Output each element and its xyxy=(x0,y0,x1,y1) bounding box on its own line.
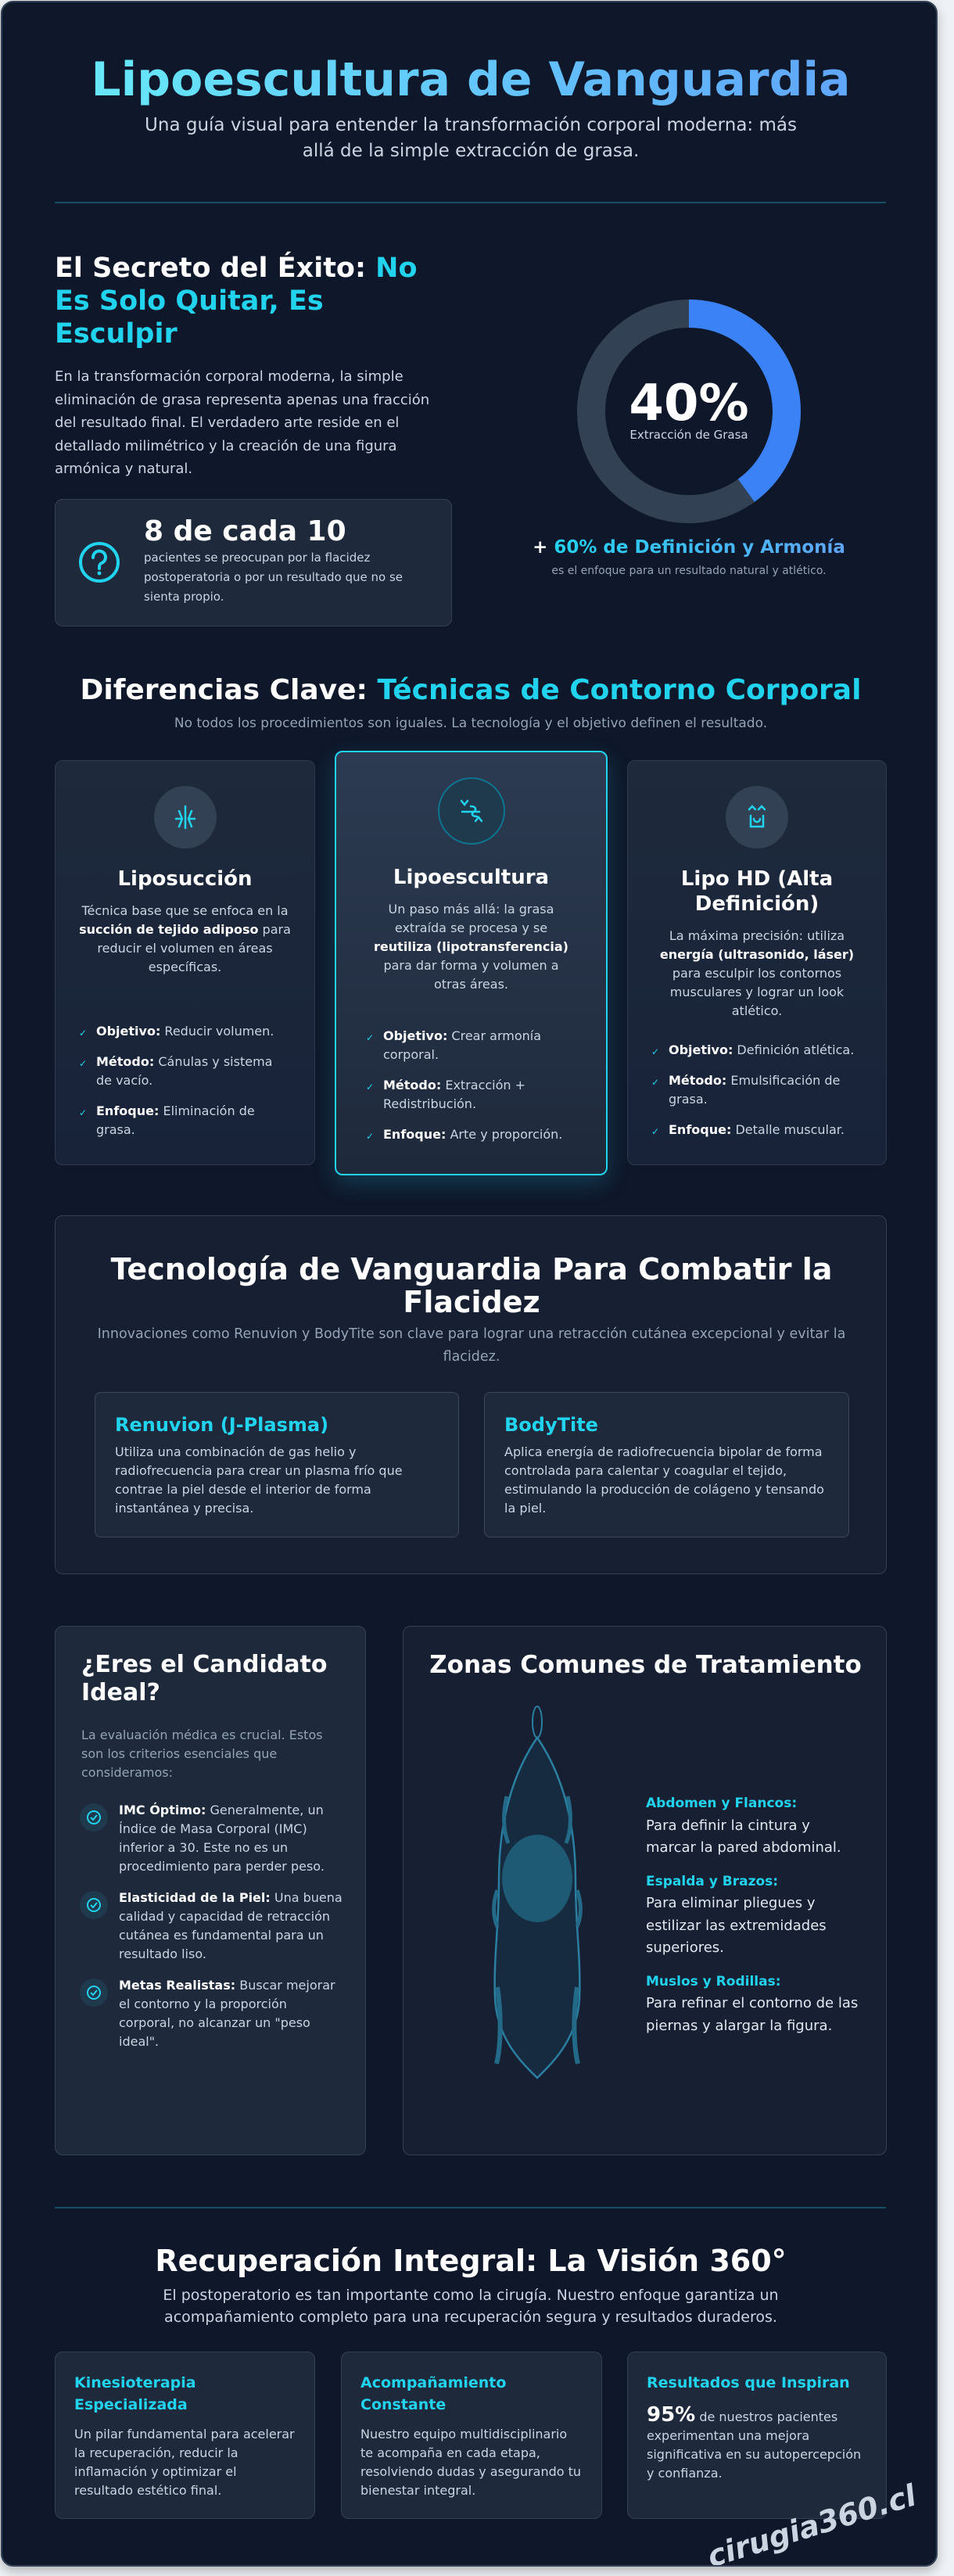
card: lipo hd: Lipo HD (Alta Definición) xyxy=(681,867,833,916)
card: liposuccion: Técnica base que se enfoca en la succión de tejido adiposo para reducir el volumen en áreas específicas. xyxy=(79,903,291,974)
body figure xyxy=(492,1706,583,2079)
card: lipoescultura: Lipoescultura xyxy=(393,866,549,889)
card: liposuccion: Método: Cánulas y sistema de vacío. xyxy=(96,1054,272,1088)
panel: candidate: ¿Eres el Candidato Ideal? xyxy=(81,1651,327,1706)
icon: question xyxy=(79,542,120,583)
title: Lipoescultura de Vanguardia xyxy=(91,52,851,107)
section 1 heading: El Secreto del Éxito: No Es Solo Quitar, Es Esculpir xyxy=(55,253,418,350)
recovery card 1: Un pilar fundamental para acelerar la recuperación, reducir la inflamación y optimizar el resultado estético final. xyxy=(74,2427,295,2498)
box: renuvion xyxy=(95,1392,459,1537)
zone labels: Para eliminar pliegues y estilizar las extremidades superiores. xyxy=(646,1895,827,1956)
card: liposuccion xyxy=(55,760,315,1165)
donut chart xyxy=(577,300,801,523)
card: lipo hd: Objetivo: Definición atlética. xyxy=(669,1042,854,1057)
panel: technology: Innovaciones como Renuvion y BodyTite son clave para lograr una retracción cutánea excepcional y evitar la flacidez. xyxy=(98,1326,845,1364)
box: renuvion: Renuvion (J-Plasma) xyxy=(115,1414,328,1436)
zone labels: Abdomen y Flancos: xyxy=(646,1796,797,1811)
panel: zones: Zonas Comunes de Tratamiento xyxy=(429,1651,862,1679)
criteria list: Elasticidad de la Piel: Una buena calidad y capacidad de retracción cutánea es fundamental para un resultado liso. xyxy=(119,1890,343,1961)
criteria list: Metas Realistas: Buscar mejorar el contorno y la proporción corporal, no alcanzar un "peso ideal". xyxy=(119,1978,335,2049)
text: El postoperatorio es tan importante como la cirugía. Nuestro enfoque garantiza un acompañamiento completo para una recuperación segura y resultados duraderos. xyxy=(163,2287,779,2326)
card: lipo hd: La máxima precisión: utiliza energía (ultrasonido, láser) para esculpir los contornos musculares y lograr un look atlético. xyxy=(660,928,854,1018)
panel: candidate xyxy=(55,1626,366,2155)
zone labels: Muslos y Rodillas: xyxy=(646,1974,780,1989)
zone labels xyxy=(646,1796,858,2033)
zone labels: Para definir la cintura y marcar la pared abdominal. xyxy=(646,1817,841,1856)
card: lipoescultura xyxy=(335,751,608,1175)
card: lipoescultura: Un paso más allá: la grasa extraída se procesa y se reutiliza (lipotransferencia) para dar forma y volumen a otras áreas. xyxy=(374,902,568,992)
recovery card 2 xyxy=(341,2352,602,2519)
recovery card 1 xyxy=(55,2352,315,2519)
icon: definition xyxy=(726,786,788,849)
panel: technology xyxy=(55,1215,887,1574)
card: lipo hd: Método: Emulsificación de grasa. xyxy=(669,1073,840,1107)
donut chart: 40% xyxy=(629,375,749,432)
panel: technology: Tecnología de Vanguardia Para Combatir la Flacidez xyxy=(111,1252,832,1319)
subtitle: Una guía visual para entender la transformación corporal moderna: más allá de la simple extracción de grasa. xyxy=(145,115,797,161)
criteria list xyxy=(80,1802,343,2049)
recovery card 2: Acompañamiento Constante xyxy=(360,2374,506,2413)
text: No todos los procedimientos son iguales. La tecnología y el objetivo definen el resultado. xyxy=(174,716,767,731)
recovery card 3 xyxy=(627,2352,887,2519)
criteria list: IMC Óptimo: Generalmente, un Índice de Masa Corporal (IMC) inferior a 30. Este no es un procedimiento para perder peso. xyxy=(119,1803,325,1874)
text: es el enfoque para un resultado natural y atlético. xyxy=(551,565,827,577)
icon: sculpt xyxy=(438,777,505,845)
donut chart: Extracción de Grasa xyxy=(629,428,748,442)
card: liposuccion: Enfoque: Eliminación de grasa. xyxy=(96,1103,255,1137)
zone labels: Espalda y Brazos: xyxy=(646,1874,778,1889)
stat number: 8 de cada 10 xyxy=(144,515,346,547)
box: renuvion: Utiliza una combinación de gas helio y radiofrecuencia para crear un plasma frío que contrae la piel desde el interior de forma instantánea y precisa. xyxy=(115,1444,403,1516)
box: bodytite xyxy=(484,1392,849,1537)
section 2 heading: Diferencias Clave: Técnicas de Contorno Corporal xyxy=(81,674,861,706)
card: lipoescultura: Método: Extracción + Redistribución. xyxy=(383,1078,525,1111)
card: lipoescultura: Objetivo: Crear armonía corporal. xyxy=(383,1028,541,1062)
card: liposuccion: Objetivo: Reducir volumen. xyxy=(96,1024,274,1039)
card: lipo hd: Enfoque: Detalle muscular. xyxy=(669,1122,845,1137)
box: bodytite: Aplica energía de radiofrecuencia bipolar de forma controlada para calentar y coagular el tejido, estimulando la producción de colágeno y tensando la piel. xyxy=(504,1444,824,1516)
card: lipo hd xyxy=(627,760,887,1165)
donut caption: + 60% de Definición y Armonía xyxy=(533,537,845,558)
icon: suction xyxy=(153,786,216,849)
recovery card 3: 95% de nuestros pacientes experimentan una mejora significativa en su autopercepción y confianza. xyxy=(647,2403,861,2481)
box: bodytite: BodyTite xyxy=(504,1414,598,1436)
recovery heading: Recuperación Integral: La Visión 360° xyxy=(155,2244,787,2278)
card: liposuccion: Liposucción xyxy=(117,867,253,891)
stat text: pacientes se preocupan por la flacidez postoperatoria o por un resultado que no se sienta propio. xyxy=(144,551,403,604)
recovery card 2: Nuestro equipo multidisciplinario te acompaña en cada etapa, resolviendo dudas y asegurando tu bienestar integral. xyxy=(360,2427,581,2498)
zone labels: Para refinar el contorno de las piernas y alargar la figura. xyxy=(646,1995,858,2033)
stat box xyxy=(55,499,452,626)
section 1 paragraph: En la transformación corporal moderna, la simple eliminación de grasa representa apenas una fracción del resultado final. El verdadero arte reside en el detallado milimétrico y la creación de una figura armónica y natural. xyxy=(55,368,429,477)
panel: zones xyxy=(403,1626,887,2155)
panel: candidate: La evaluación médica es crucial. Estos son los criterios esenciales que consideramos: xyxy=(81,1727,323,1780)
card: lipoescultura: Enfoque: Arte y proporción. xyxy=(383,1127,562,1142)
recovery card 1: Kinesioterapia Especializada xyxy=(74,2374,196,2413)
recovery card 3: Resultados que Inspiran xyxy=(647,2374,850,2391)
